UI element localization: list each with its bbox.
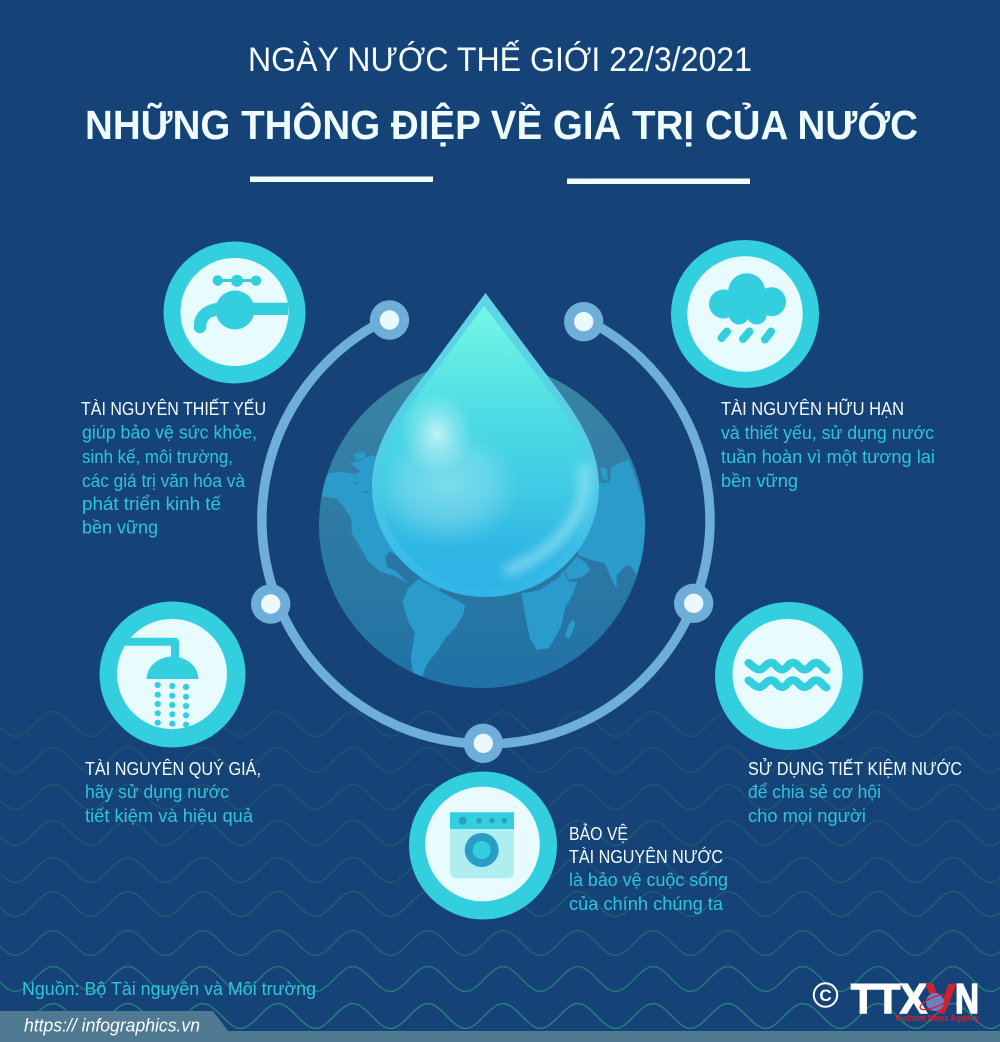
- text: finite resource: và thiết yếu, sử dụng nước: [721, 423, 934, 443]
- logo: TTXVN: V: [926, 975, 956, 1022]
- icon: shower: [100, 602, 246, 748]
- text: finite resource: tuần hoàn vì một tương lai: [721, 447, 935, 467]
- drop highlight: right crescent: [510, 470, 585, 570]
- text: finite resource: bền vững: [721, 471, 798, 491]
- text: finite resource: [721, 398, 935, 491]
- text: protect water resources: BẢO VỆ: [569, 823, 628, 844]
- icon: rain cloud: [671, 240, 819, 388]
- text: protect water resources: TÀI NGUYÊN NƯỚC: [569, 846, 723, 867]
- text: essential resource: TÀI NGUYÊN THIẾT YẾU: [81, 398, 266, 419]
- text: protect water resources: là bảo vệ cuộc sống: [569, 870, 728, 890]
- ring nodes: [251, 300, 713, 763]
- text: essential resource: bền vững: [82, 518, 158, 538]
- drop highlight: upper left: [401, 393, 473, 473]
- text: essential resource: phát triển kinh tế: [82, 494, 221, 514]
- text: saving water: [748, 758, 962, 826]
- logo: TTXVN: Vietnam News Agency: [895, 1013, 979, 1023]
- logo: TTXVN: C: [819, 986, 832, 1005]
- icon: waves: [715, 602, 863, 750]
- text: saving water: SỬ DỤNG TIẾT KIỆM NƯỚC: [748, 758, 962, 779]
- logo: TTXVN: N: [955, 975, 979, 1022]
- text: essential resource: giúp bảo vệ sức khỏe,: [82, 422, 257, 442]
- text: essential resource: sinh kế, môi trường,: [82, 447, 233, 467]
- text: saving water: để chia sẻ cơ hội: [748, 782, 881, 802]
- text: precious resource: [85, 759, 261, 826]
- text: precious resource: hãy sử dụng nước: [85, 782, 229, 802]
- text: protect water resources: của chính chúng ta: [569, 894, 724, 914]
- text: precious resource: TÀI NGUYÊN QUÝ GIÁ,: [85, 759, 261, 779]
- text: saving water: cho mọi người: [748, 806, 866, 826]
- text: finite resource: TÀI NGUYÊN HỮU HẠN: [721, 398, 904, 419]
- logo: TTXVN: TTX: [851, 975, 927, 1022]
- footer band: [0, 1011, 1000, 1042]
- text: essential resource: các giá trị văn hóa và: [82, 471, 246, 491]
- source line: Nguồn: Bộ Tài nguyên và Môi trường: [22, 979, 316, 999]
- icon: faucet: [164, 242, 306, 384]
- heading underline bars: [250, 176, 750, 184]
- text: essential resource: [81, 398, 266, 538]
- title line: event and date: NGÀY NƯỚC THẾ GIỚI 22/3/2021: [248, 41, 752, 79]
- water drop: [372, 293, 599, 597]
- website url: https:// infographics.vn: [24, 1016, 200, 1036]
- text: precious resource: tiết kiệm và hiệu quả: [85, 806, 254, 826]
- drop highlight: soft centre: [376, 430, 520, 546]
- globe with continents: [318, 362, 647, 688]
- text: protect water resources: [569, 823, 728, 914]
- main heading: NHỮNG THÔNG ĐIỆP VỀ GIÁ TRỊ CỦA NƯỚC: [85, 102, 918, 148]
- icon: washing machine: [409, 772, 557, 920]
- logo: TTXVN: [814, 975, 979, 1023]
- connecting ring: [262, 325, 710, 744]
